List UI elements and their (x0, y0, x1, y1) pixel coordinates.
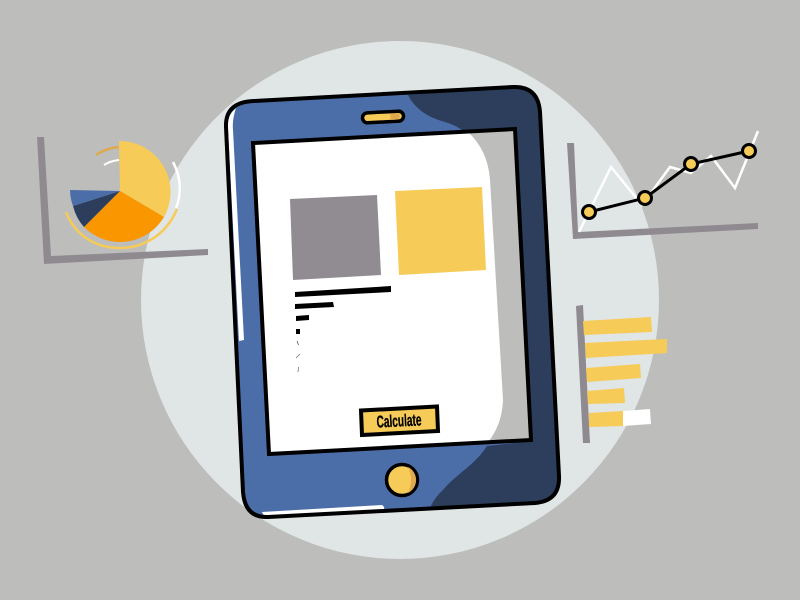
data point 1 (582, 206, 596, 218)
bottom gloss highlight (262, 505, 384, 516)
chart axes (567, 143, 758, 239)
bar 1 (583, 317, 652, 335)
tablet body (226, 87, 559, 517)
background circle (141, 41, 659, 559)
home button shade (408, 467, 416, 493)
pie slice: yellow (119, 141, 171, 217)
speaker shade (390, 114, 400, 120)
arc: white small (104, 160, 119, 165)
screen frame (253, 129, 531, 454)
yellow image block (395, 187, 486, 275)
text line 1 (295, 286, 391, 297)
pie slice: orange (84, 191, 164, 242)
screen (253, 129, 531, 454)
bar 5 white remainder (623, 409, 651, 426)
tick mark 1 (297, 341, 298, 345)
tablet dark shadow area (408, 87, 559, 508)
tick mark 3 (297, 367, 300, 372)
pie slice: navy (73, 191, 120, 227)
data point 2 (638, 192, 652, 204)
bar 5 (589, 411, 623, 427)
screen white page (253, 131, 503, 454)
bar 4 (587, 388, 625, 404)
tablet outline (226, 87, 559, 517)
bar axis (576, 305, 590, 443)
arc: yellow bottom (66, 209, 177, 248)
text line 2 (295, 302, 334, 309)
speaker slot (362, 111, 404, 123)
pie slice: blue (70, 190, 120, 206)
grey image block (290, 195, 381, 280)
button label: Calculate (376, 410, 422, 432)
bar 2 (585, 339, 667, 358)
text line 4 (296, 329, 300, 334)
chart axes (37, 137, 208, 264)
data point 3 (684, 158, 698, 170)
speaker (362, 111, 404, 123)
left gloss highlight (228, 108, 244, 341)
home button (386, 464, 418, 496)
data point 4 (742, 144, 756, 158)
arc: orange top (96, 147, 119, 155)
white zigzag line (579, 131, 758, 232)
tick mark 2 (296, 354, 300, 358)
calculate button (361, 406, 438, 435)
text line 3 (296, 315, 309, 321)
tablet (226, 87, 559, 517)
button box (361, 406, 438, 435)
screen grey backing (253, 129, 531, 454)
line chart panel (567, 131, 758, 239)
bar chart panel (576, 305, 667, 443)
arc: white right (173, 162, 180, 208)
bar 3 (586, 364, 641, 382)
home button disc (386, 464, 418, 496)
pie chart panel (37, 137, 208, 264)
black trend line (589, 151, 749, 212)
